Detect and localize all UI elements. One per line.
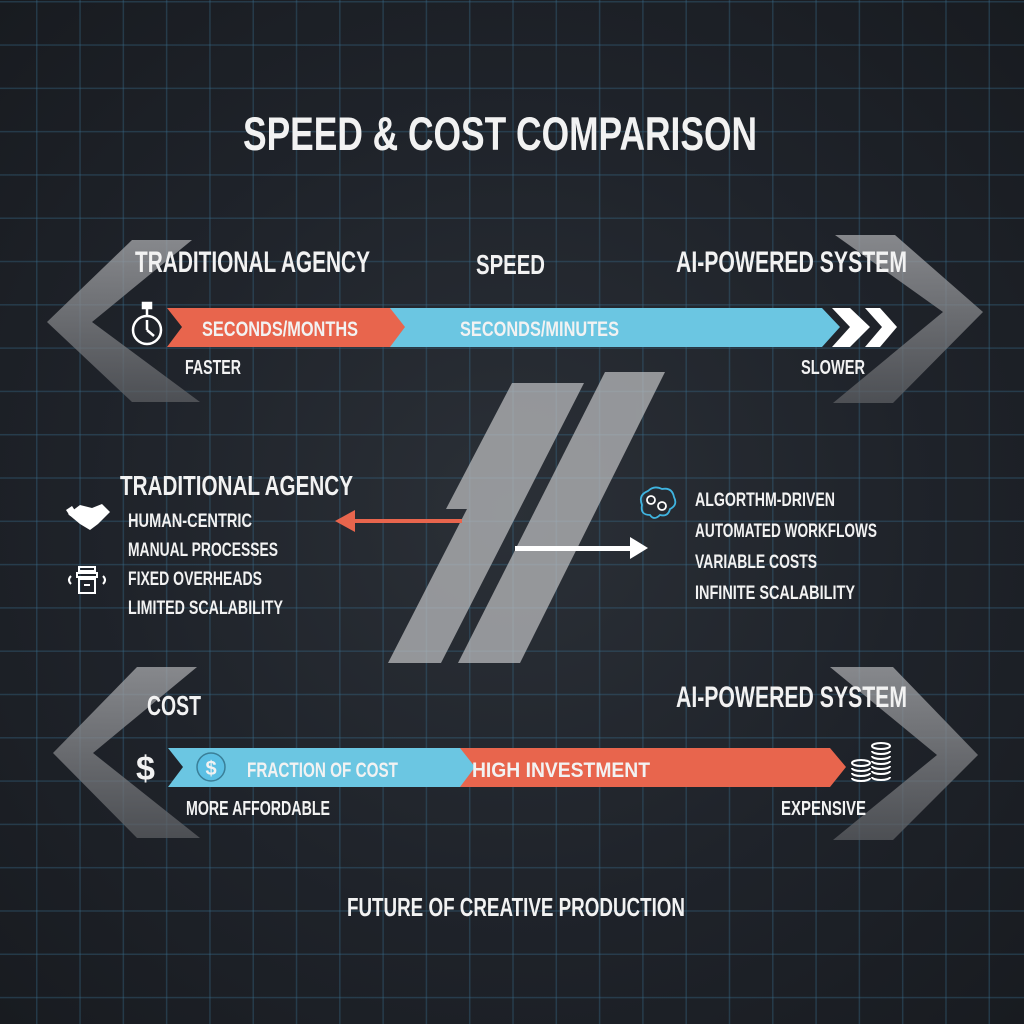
label: faster: FASTER (185, 357, 241, 379)
icon: stopwatch (133, 303, 161, 344)
arrow: white right (515, 537, 648, 559)
cost bar (168, 748, 846, 787)
heading: speed: SPEED (476, 249, 545, 280)
panel: ai-powered system: VARIABLE COSTS (695, 552, 817, 573)
heading: ai-powered system (speed): AI-POWERED SYSTEM (676, 246, 907, 279)
panel: traditional agency: MANUAL PROCESSES (128, 540, 278, 561)
cost bar: $ (205, 758, 217, 780)
panel: traditional agency (120, 470, 353, 619)
icon: dollar: $ (136, 750, 155, 788)
icon: coin stacks (852, 743, 890, 781)
cost bar: FRACTION OF COST (247, 759, 398, 782)
icon: filing cabinet (69, 567, 105, 593)
heading: ai-powered system (cost): AI-POWERED SYSTEM (676, 681, 907, 714)
center slashes (388, 372, 665, 663)
chevron: bottom left (53, 667, 200, 838)
title: SPEED & COST COMPARISON (243, 107, 757, 160)
footer: FUTURE OF CREATIVE PRODUCTION (347, 892, 685, 922)
panel: traditional agency: LIMITED SCALABILITY (128, 598, 283, 619)
panel: ai-powered system: INFINITE SCALABILITY (695, 583, 855, 604)
speed bar (167, 308, 897, 347)
panel: traditional agency: TRADITIONAL AGENCY (120, 470, 353, 501)
arrow: red left (335, 510, 462, 532)
panel: ai-powered system: ALGORTHM-DRIVEN (695, 490, 835, 511)
panel: traditional agency: FIXED OVERHEADS (128, 569, 262, 590)
label: more affordable: MORE AFFORDABLE (186, 798, 330, 820)
icon: handshake (66, 504, 110, 530)
heading: cost: COST (147, 690, 201, 721)
panel: ai-powered system (695, 490, 877, 604)
chevron: top right (833, 235, 983, 403)
chevron: bottom right (830, 667, 978, 840)
speed bar: SECONDS/MONTHS (202, 318, 358, 341)
chevron: top left (47, 240, 200, 402)
label: slower: SLOWER (801, 357, 865, 379)
label: expensive: EXPENSIVE (781, 798, 866, 820)
panel: ai-powered system: AUTOMATED WORKFLOWS (695, 521, 877, 542)
cost bar: HIGH INVESTMENT (472, 759, 650, 782)
icon: brain with gears (641, 487, 675, 518)
speed bar: SECONDS/MINUTES (460, 318, 619, 341)
heading: traditional agency (speed): TRADITIONAL AGENCY (135, 246, 370, 279)
panel: traditional agency: HUMAN-CENTRIC (128, 511, 252, 532)
